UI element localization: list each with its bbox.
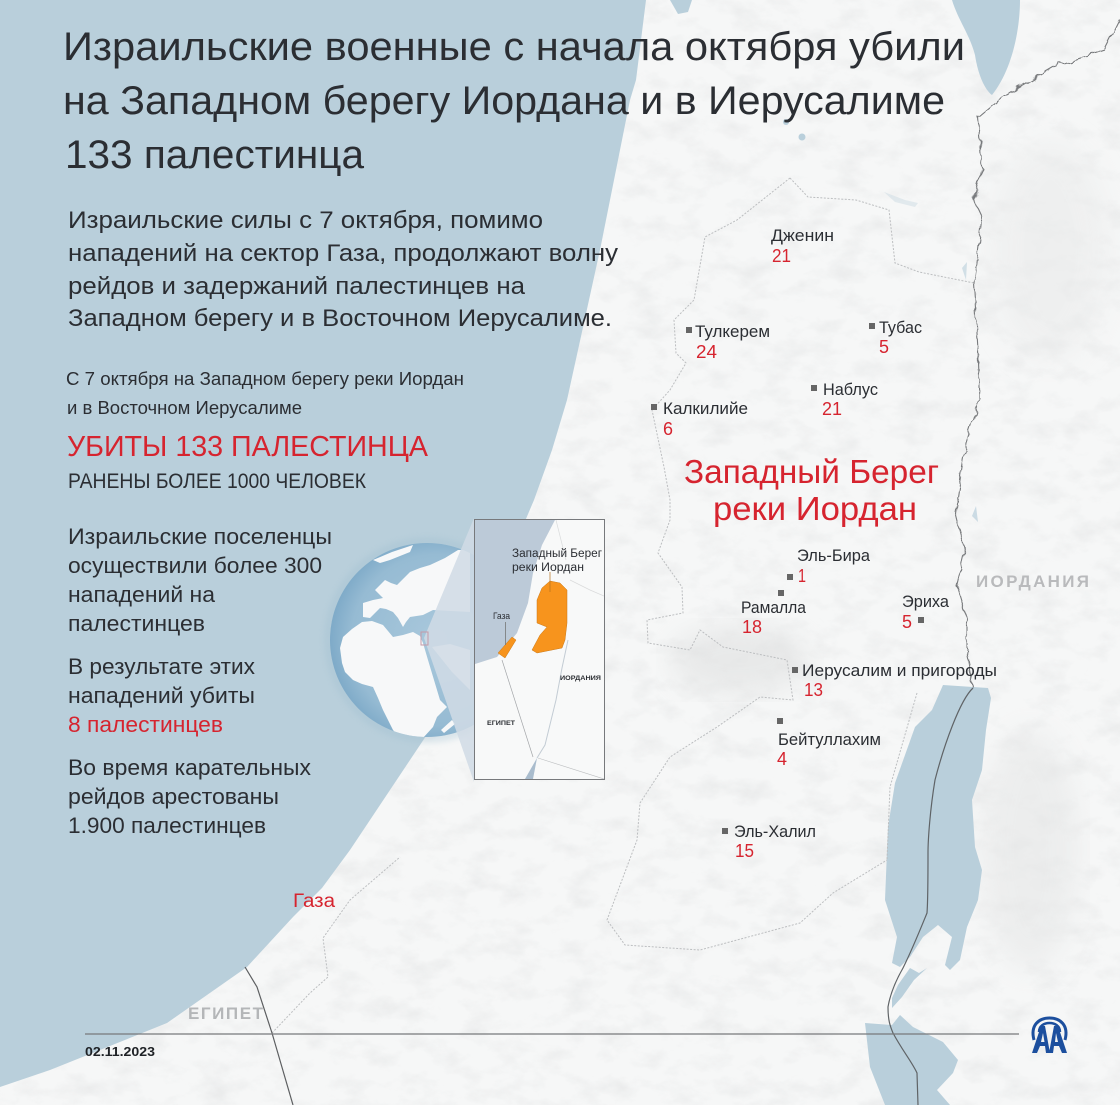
arrests text <box>68 755 311 838</box>
inset sea <box>474 520 555 664</box>
label: Египет: ЕГИПЕТ <box>188 1004 264 1023</box>
city: Рамалла <box>741 590 806 637</box>
inset west bank leader <box>549 572 551 592</box>
inset label gaza: Газа <box>493 611 510 621</box>
gaza boundary <box>272 857 400 1033</box>
date: 02.11.2023 <box>85 1044 155 1059</box>
city: Наблус: 21 <box>822 399 842 419</box>
settler attacks text <box>68 524 332 636</box>
city: Бейтуллахим <box>777 718 881 769</box>
settler deaths text: 8 палестинцев <box>68 712 223 737</box>
intro paragraph <box>68 207 618 332</box>
inset red sea gulf <box>525 758 537 779</box>
jordan border through dead sea <box>888 688 973 1105</box>
title: 133 палестинца <box>65 133 365 177</box>
inset west bank <box>532 581 567 653</box>
footer rule <box>85 1033 1019 1035</box>
intro paragraph: рейдов и задержаний палестинцев на <box>68 273 526 300</box>
west bank boundary <box>607 178 974 950</box>
inset gaza <box>498 637 516 658</box>
city: Эль-Бира: Эль-Бира <box>797 546 871 565</box>
city: Калкилийе: 6 <box>663 419 673 439</box>
inset map <box>474 520 604 780</box>
lakes and water bodies <box>670 0 1020 1105</box>
inset border <box>474 520 604 780</box>
city: Эль-Халил <box>722 822 816 861</box>
casualty summary: и в Восточном Иерусалиме <box>67 397 302 418</box>
city: Эль-Халил: Эль-Халил <box>734 822 816 841</box>
city: Эриха: 5 <box>902 612 912 632</box>
casualty summary: РАНЕНЫ БОЛЕЕ 1000 ЧЕЛОВЕК <box>68 470 367 493</box>
city: Тубас: 5 <box>879 337 889 357</box>
city: Рамалла: 18 <box>742 617 762 637</box>
casualty summary: С 7 октября на Западном берегу реки Иордан <box>66 368 464 389</box>
inset label egypt: ЕГИПЕТ <box>487 720 515 727</box>
target marker <box>421 632 428 645</box>
arrests text: 1.900 палестинцев <box>68 813 266 838</box>
city: Эль-Халил: 15 <box>735 841 754 861</box>
casualty summary <box>66 368 464 493</box>
mediterranean sea <box>0 0 646 1087</box>
intro paragraph: нападений на сектор Газа, продолжают волну <box>68 240 618 267</box>
inset label jordan: ИОРДАНИЯ <box>560 675 601 682</box>
icon: AA logo <box>1032 1018 1067 1053</box>
title: Израильские военные с начала октября убили <box>63 25 965 69</box>
settler attacks text: палестинцев <box>68 611 205 636</box>
settler attacks text: осуществили более 300 <box>68 553 322 578</box>
city: Эль-Бира <box>787 546 871 586</box>
city: Дженин: Дженин <box>771 226 834 245</box>
globe halo <box>324 537 530 743</box>
globe locator <box>328 518 474 782</box>
label: Иордания: ИОРДАНИЯ <box>976 572 1089 591</box>
view cone <box>424 518 474 782</box>
inset label west bank: Западный Берег <box>512 548 602 560</box>
arrests text: Во время карательных <box>68 755 311 780</box>
city: Тулкерем: 24 <box>696 342 717 362</box>
west bank heading: реки Иордан <box>713 490 917 527</box>
intro paragraph: Израильские силы с 7 октября, помимо <box>68 207 543 234</box>
intro paragraph: Западном берегу и в Восточном Иерусалиме. <box>68 305 612 332</box>
city: Наблус <box>811 380 878 419</box>
city: Тулкерем: Тулкерем <box>695 322 770 341</box>
casualty summary: УБИТЫ 133 ПАЛЕСТИНЦА <box>67 431 429 463</box>
city: Эриха <box>902 592 950 632</box>
city: Иерусалим и пригороды: Иерусалим и пригороды <box>802 661 997 680</box>
city: Эль-Бира: 1 <box>798 566 806 586</box>
city: Бейтуллахим: Бейтуллахим <box>778 730 881 749</box>
city: Калкилийе: Калкилийе <box>663 399 748 418</box>
city: Тубас: Тубас <box>879 318 922 337</box>
jordan border <box>955 20 1120 687</box>
city: Дженин: 21 <box>772 246 791 266</box>
city: Дженин <box>771 226 834 266</box>
city: Иерусалим и пригороды: 13 <box>804 680 823 700</box>
inset gaza leader <box>504 622 506 645</box>
inset label west bank line 2: реки Иордан <box>512 562 584 574</box>
west bank heading: Западный Берег <box>684 453 939 490</box>
city: Бейтуллахим: 4 <box>777 749 787 769</box>
city: Тулкерем <box>686 322 770 362</box>
settler deaths text <box>68 654 255 737</box>
city: Иерусалим и пригороды <box>792 661 997 700</box>
settler attacks text: Израильские поселенцы <box>68 524 332 549</box>
city: Тубас <box>869 318 922 357</box>
title: на Западном берегу Иордана и в Иерусалиме <box>63 79 945 123</box>
city: Калкилийе <box>651 399 748 439</box>
globe ocean <box>330 543 524 737</box>
settler deaths text: В результате этих <box>68 654 255 679</box>
arrests text: рейдов арестованы <box>68 784 279 809</box>
city: Эриха: Эриха <box>902 592 950 611</box>
west bank heading <box>684 453 939 527</box>
city: Наблус: Наблус <box>823 380 878 399</box>
egypt border <box>245 967 293 1105</box>
settler deaths text: нападений убиты <box>68 683 255 708</box>
label: Газа: Газа <box>293 891 335 912</box>
city: Рамалла: Рамалла <box>741 598 806 617</box>
globe continents <box>340 545 470 738</box>
title <box>63 25 965 177</box>
settler attacks text: нападений на <box>68 582 216 607</box>
